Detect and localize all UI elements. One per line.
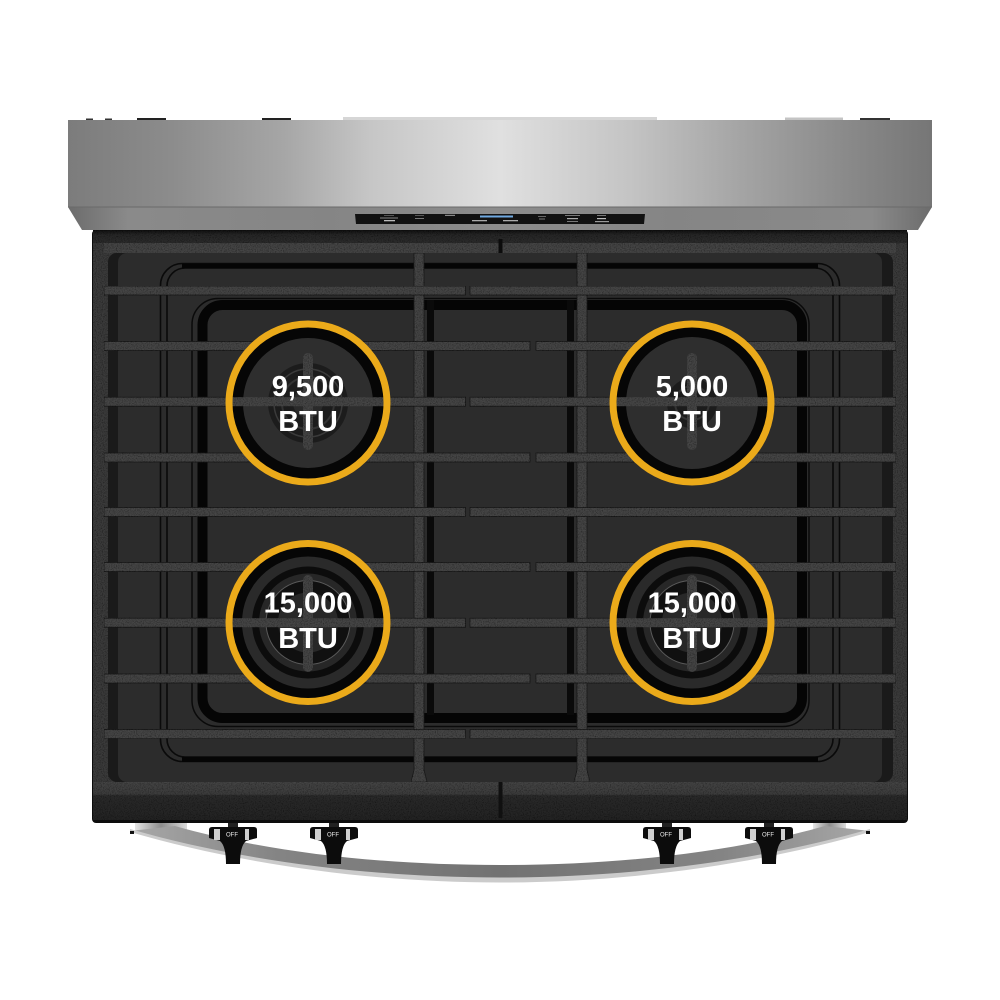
backguard stainless panel xyxy=(68,120,932,207)
inner spill channel xyxy=(192,298,809,726)
callout: front right burner rating xyxy=(613,544,771,702)
top edge hardware xyxy=(86,117,890,120)
callout: rear right burner rating: 5,000 xyxy=(656,371,728,403)
burner knob rear right: OFF xyxy=(660,832,672,838)
callout: front left burner rating xyxy=(229,544,387,702)
callout: rear left burner rating: 9,500 xyxy=(272,371,344,403)
control panel xyxy=(355,214,645,224)
burner knob rear left: OFF xyxy=(327,832,339,838)
callout: rear right burner rating xyxy=(613,324,771,482)
callout: front left burner rating: BTU xyxy=(278,623,338,655)
burner knob front right: OFF xyxy=(762,832,774,838)
callout: rear left burner rating: BTU xyxy=(278,406,338,438)
cast iron grates xyxy=(104,239,896,818)
burner rear left 9,500 BTU xyxy=(232,327,384,479)
burner knob rear left xyxy=(310,820,358,864)
burner front left 15,000 BTU xyxy=(232,546,384,698)
burner front right 15,000 BTU xyxy=(616,546,768,698)
callout: rear right burner rating: BTU xyxy=(662,406,722,438)
backguard lower trim xyxy=(68,206,932,230)
burner knob front left xyxy=(209,820,257,864)
cooktop surface xyxy=(92,230,908,823)
callout: rear left burner rating xyxy=(229,324,387,482)
outer spill channel xyxy=(160,264,840,762)
oven door handle xyxy=(130,820,870,882)
burner knob rear right xyxy=(643,820,691,864)
callout: front right burner rating: BTU xyxy=(662,623,722,655)
callout: front right burner rating: 15,000 xyxy=(648,588,736,620)
callout: front left burner rating: 15,000 xyxy=(264,588,352,620)
burner knob front right xyxy=(745,820,793,864)
burner rear right 5,000 BTU xyxy=(616,327,768,479)
burner knob front left: OFF xyxy=(226,832,238,838)
